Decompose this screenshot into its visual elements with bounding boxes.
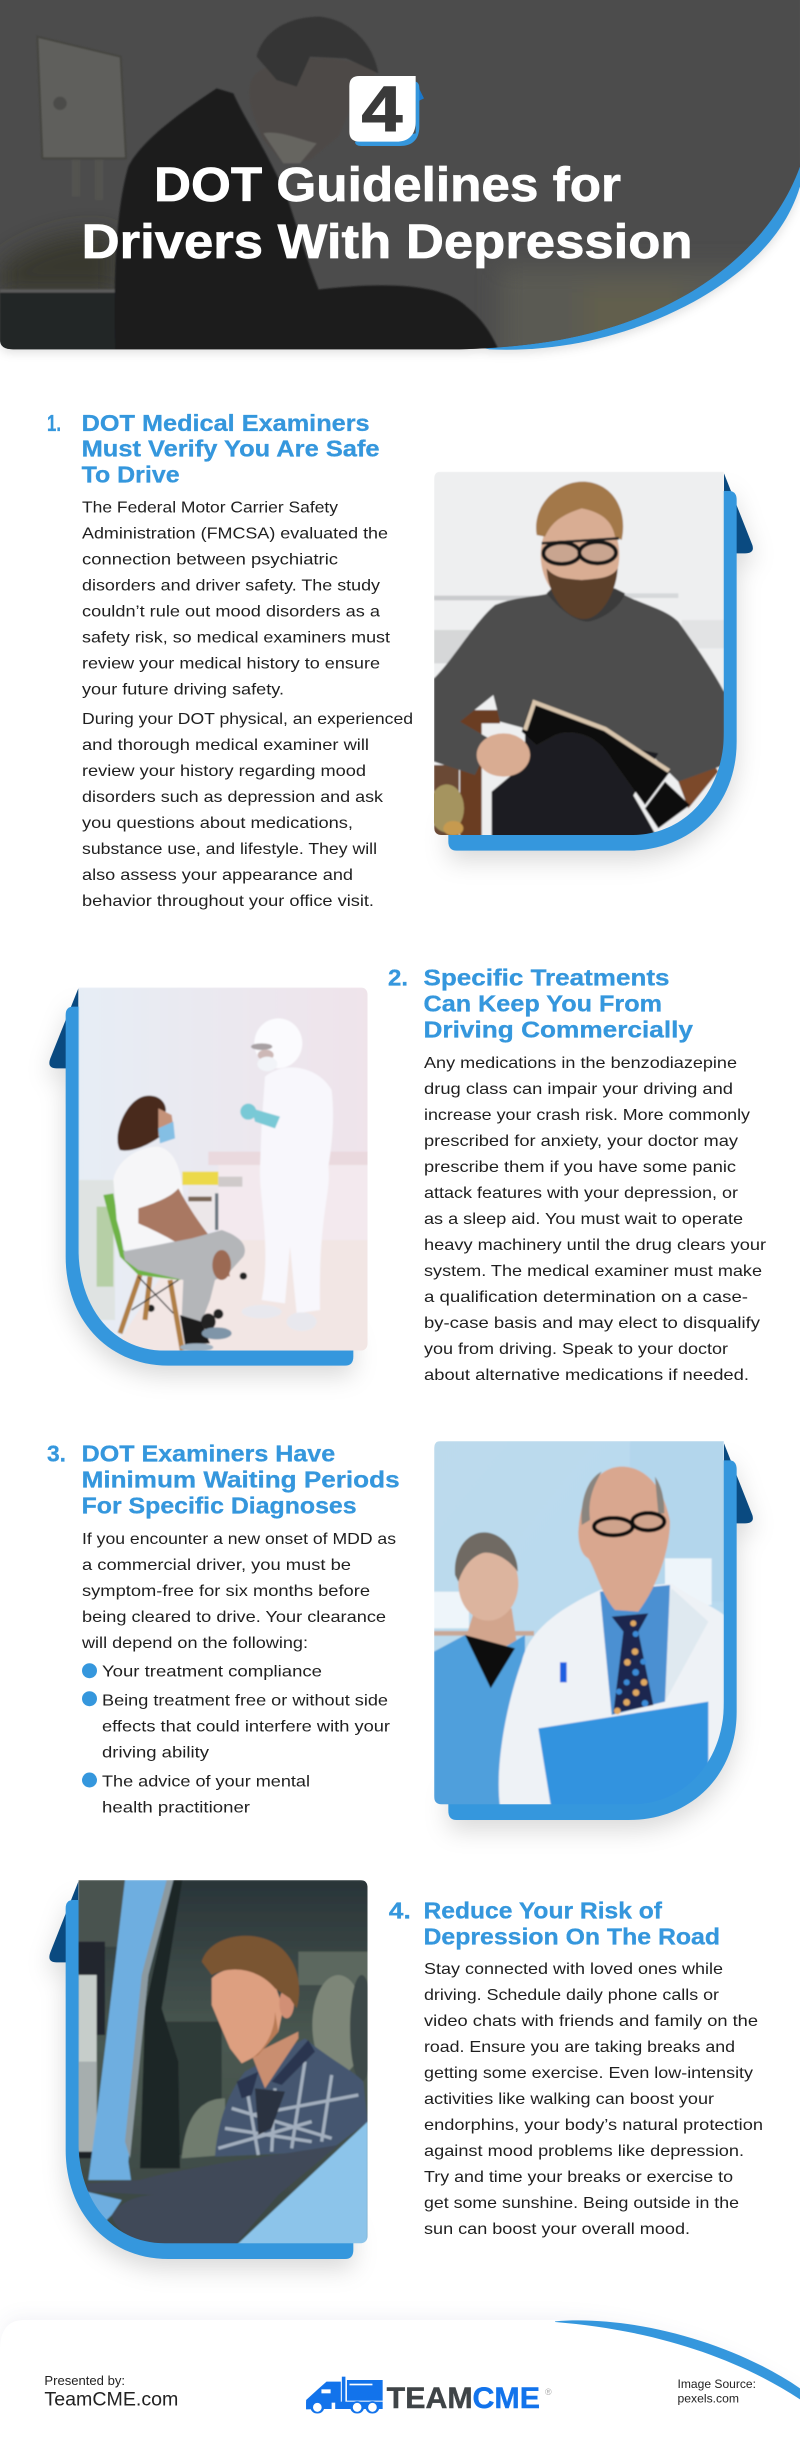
text block: section 1 body: [82, 500, 413, 910]
heading 3: For Specific Diagnoses: [82, 1493, 357, 1519]
text block: section 4 body: road. Ensure you are taking breaks and: [424, 2039, 735, 2056]
heading 3: 3.: [47, 1441, 66, 1467]
text block: section 3 body: [81, 1531, 396, 1652]
text block: section 2 body: Any medications in the benzodiazepine: [424, 1055, 737, 1072]
presented by: Presented by:: [44, 2373, 125, 2388]
text block: section 2 body: prescribed for anxiety, your doctor may: [424, 1133, 738, 1150]
image frame: doctor in protective suit with patient: [49, 987, 368, 1366]
text block: section 1 body: you questions about medications,: [82, 815, 353, 832]
heading 4: Reduce Your Risk of: [424, 1897, 662, 1923]
bullet list: Your treatment compliance: [102, 1664, 322, 1681]
heading 2: [388, 965, 693, 1043]
text block: section 1 body: couldn’t rule out mood disorders as a: [82, 604, 380, 620]
image frame: doctor and nurse: [434, 1441, 753, 1820]
text block: section 4 body: Stay connected with loved ones while: [424, 1961, 723, 1978]
presented by: [44, 2373, 178, 2411]
heading 2: Can Keep You From: [424, 991, 662, 1017]
badge: number 4: 4: [362, 73, 403, 145]
heading 1: 1.: [47, 410, 61, 436]
heading 1: DOT Medical Examiners: [82, 410, 370, 436]
image frame: man in turtleneck with book: [429, 472, 753, 851]
text block: section 1 body: During your DOT physical, an experienced: [82, 711, 413, 728]
panel: section 3: [47, 1441, 753, 1820]
text block: section 1 body: safety risk, so medical examiners must: [82, 630, 391, 646]
text block: section 2 body: system. The medical examiner must make: [424, 1263, 762, 1280]
heading 2: 2.: [388, 965, 408, 991]
bullet list: driving ability: [102, 1745, 209, 1762]
text block: section 4 body: activities like walking can boost your: [424, 2091, 715, 2108]
text block: section 3 body: will depend on the following:: [81, 1635, 308, 1652]
text block: section 2 body: about alternative medications if needed.: [424, 1367, 749, 1384]
title: DOT Guidelines for: [154, 159, 621, 212]
heading 4: [389, 1897, 720, 1949]
logo: TeamCME truck: ®: [545, 2387, 552, 2397]
text block: section 4 body: [424, 1961, 763, 2238]
footer panel: [0, 2320, 800, 2460]
bullet list: health practitioner: [102, 1800, 251, 1817]
heading 2: Specific Treatments: [424, 965, 670, 991]
text block: section 3 body: being cleared to drive. Your clearance: [82, 1609, 386, 1626]
text block: section 2 body: drug class can impair your driving and: [424, 1081, 733, 1098]
text block: section 4 body: against mood problems like depression.: [424, 2143, 744, 2160]
text block: section 4 body: video chats with friends and family on the: [424, 2013, 758, 2030]
bullet list: effects that could interfere with your: [102, 1719, 391, 1736]
text block: section 1 body: and thorough medical examiner will: [82, 737, 369, 754]
text block: section 2 body: prescribe them if you have some panic: [424, 1159, 736, 1176]
heading 2: Driving Commercially: [424, 1017, 693, 1043]
text block: section 3 body: symptom-free for six months before: [82, 1583, 370, 1600]
heading 4: 4.: [389, 1897, 411, 1923]
text block: section 2 body: as a sleep aid. You must wait to operate: [424, 1211, 743, 1228]
text block: section 3 body: a commercial driver, you must be: [82, 1557, 351, 1574]
text block: section 4 body: getting some exercise. Even low-intensity: [424, 2065, 753, 2082]
header photo: man with head bowed: [0, 17, 767, 367]
bullet list: Being treatment free or without side: [102, 1693, 388, 1710]
text block: section 1 body: disorders and driver safety. The study: [82, 578, 380, 594]
text block: section 2 body: by-case basis and may elect to disqualify: [424, 1315, 760, 1332]
bullet list: The advice of your mental: [102, 1774, 310, 1791]
image source: [678, 2377, 756, 2406]
title: Drivers With Depression: [82, 216, 693, 269]
text block: section 4 body: get some sunshine. Being outside in the: [424, 2195, 739, 2212]
text block: section 1 body: connection between psychiatric: [82, 552, 338, 568]
text block: section 1 body: review your history regarding mood: [82, 763, 366, 780]
title: [82, 159, 693, 269]
heading 1: Must Verify You Are Safe: [82, 436, 380, 462]
panel: section 1: [47, 410, 753, 910]
presented by: TeamCME.com: [44, 2390, 178, 2411]
heading 4: Depression On The Road: [424, 1923, 720, 1949]
text block: section 1 body: substance use, and lifestyle. They will: [82, 841, 377, 858]
text block: section 2 body: [424, 1055, 767, 1384]
header banner: [0, 0, 800, 367]
logo: TeamCME truck: TEAM: [387, 2382, 473, 2415]
text block: section 1 body: The Federal Motor Carrier Safety: [82, 500, 338, 516]
text block: section 2 body: you from driving. Speak to your doctor: [424, 1341, 729, 1358]
text block: section 1 body: disorders such as depression and ask: [82, 789, 384, 806]
logo: TeamCME truck: CME: [472, 2382, 540, 2415]
text block: section 1 body: your future driving safety.: [82, 682, 284, 698]
text block: section 3 body: If you encounter a new onset of MDD as: [82, 1531, 396, 1548]
text block: section 4 body: Try and time your breaks or exercise to: [424, 2169, 733, 2186]
heading 3: DOT Examiners Have: [82, 1441, 335, 1467]
footer blue arc: [555, 2320, 800, 2399]
text block: section 2 body: a qualification determination on a case-: [424, 1289, 748, 1306]
heading 3: [47, 1441, 400, 1519]
panel: section 4: [49, 1880, 763, 2259]
text block: section 4 body: endorphins, your body’s natural protection: [424, 2117, 763, 2134]
text block: section 1 body: review your medical history to ensure: [82, 656, 380, 672]
text block: section 2 body: attack features with your depression, or: [424, 1185, 739, 1202]
text block: section 4 body: sun can boost your overall mood.: [424, 2221, 690, 2238]
text block: section 2 body: heavy machinery until the drug clears your: [424, 1237, 767, 1254]
heading 3: Minimum Waiting Periods: [82, 1467, 400, 1493]
text block: section 1 body: behavior throughout your office visit.: [82, 893, 374, 910]
text block: section 2 body: increase your crash risk. More commonly: [424, 1107, 750, 1124]
heading 1: To Drive: [82, 462, 180, 488]
panel: section 2: [49, 965, 767, 1384]
text block: section 1 body: Administration (FMCSA) evaluated the: [82, 526, 388, 542]
text block: section 4 body: driving. Schedule daily phone calls or: [424, 1987, 720, 2004]
image source: Image Source:: [678, 2377, 756, 2391]
heading 1: [47, 410, 380, 488]
logo: TeamCME truck: [306, 2377, 552, 2415]
image source: pexels.com: [678, 2392, 739, 2406]
image frame: driver in truck cab: [49, 1880, 373, 2259]
text block: section 1 body: also assess your appearance and: [82, 867, 353, 884]
badge: number 4: [349, 73, 424, 146]
bullet list: [82, 1663, 391, 1817]
